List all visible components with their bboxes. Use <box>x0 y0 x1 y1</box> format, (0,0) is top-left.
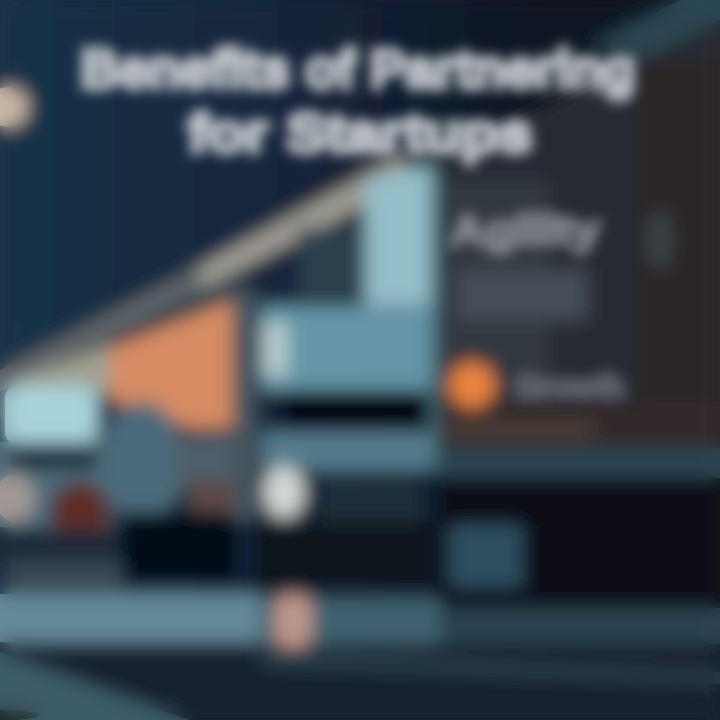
line under the label <box>445 422 595 436</box>
trailer side wall <box>435 20 720 450</box>
headlight reflection <box>274 594 312 648</box>
teal corner streak <box>590 0 720 60</box>
orange sunset panel <box>110 300 232 428</box>
road surface <box>0 594 260 642</box>
central truck cab <box>365 165 432 305</box>
left edge glowing marker <box>0 87 28 127</box>
title: for Startups <box>188 101 532 164</box>
headlight <box>264 466 304 518</box>
cab edge glow <box>430 170 438 470</box>
dim band under the beam <box>0 272 240 420</box>
faint side mark <box>646 210 674 270</box>
beige patch above left panel <box>15 345 110 400</box>
trailer base stripes <box>440 402 720 450</box>
middle grey-blue truck <box>100 402 184 522</box>
label beside the orange icon: Growth <box>515 368 625 406</box>
orange icon dot <box>449 362 495 408</box>
left truck body <box>0 442 112 527</box>
title: Benefits of Partnering <box>80 37 636 100</box>
title <box>80 37 636 164</box>
vertical post <box>232 290 256 520</box>
panel heading: Agility <box>450 206 601 255</box>
panel body text block <box>458 270 588 320</box>
diagonal roof beam <box>200 156 418 290</box>
light panel far left <box>5 386 97 444</box>
